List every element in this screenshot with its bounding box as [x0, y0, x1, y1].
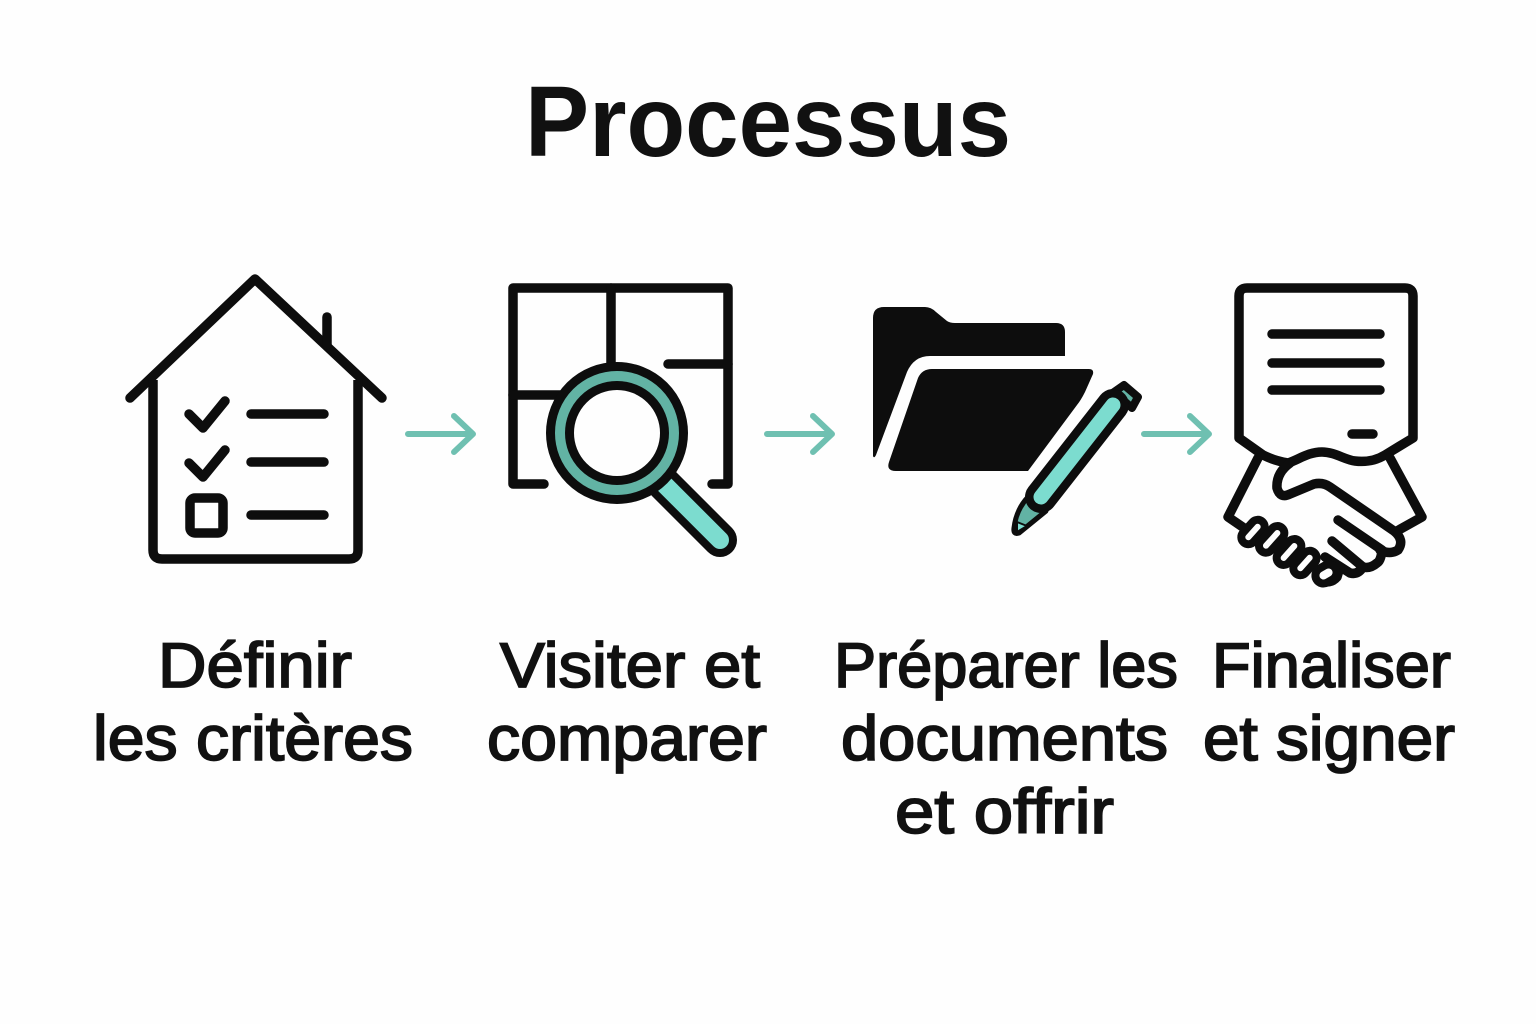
icon: house with checklist — [130, 279, 382, 559]
arrow 3 — [1144, 416, 1209, 452]
label: step 4: Finaliser — [1212, 631, 1451, 701]
label: step 2 — [487, 631, 767, 774]
contract — [1239, 288, 1413, 463]
title: Processus — [525, 66, 1011, 178]
label: step 3: documents — [841, 704, 1168, 774]
magnifier lens — [550, 366, 684, 500]
label: step 2: Visiter et — [500, 631, 761, 701]
arrow 1 — [408, 416, 473, 452]
label: step 1 — [93, 631, 413, 774]
magnifier handle — [664, 484, 720, 540]
pen — [1014, 385, 1138, 533]
label: step 4 — [1203, 631, 1455, 774]
label: step 1: Définir — [158, 631, 352, 701]
folder back — [873, 307, 1065, 457]
arrow 2 — [767, 416, 832, 452]
label: step 3: Préparer les — [834, 631, 1178, 701]
label: step 4: et signer — [1203, 704, 1455, 774]
label: step 2: comparer — [487, 704, 767, 774]
label: step 1: les critères — [93, 704, 413, 774]
icon: floor plan with magnifying glass — [513, 288, 728, 540]
icon: folder and pen — [873, 307, 1138, 533]
label: step 3: et offrir — [895, 777, 1114, 847]
folder front — [888, 369, 1093, 471]
label: step 3 — [834, 631, 1178, 847]
icon: contract and handshake — [1228, 288, 1422, 586]
handshake — [1228, 458, 1258, 530]
fingers — [1238, 517, 1340, 586]
